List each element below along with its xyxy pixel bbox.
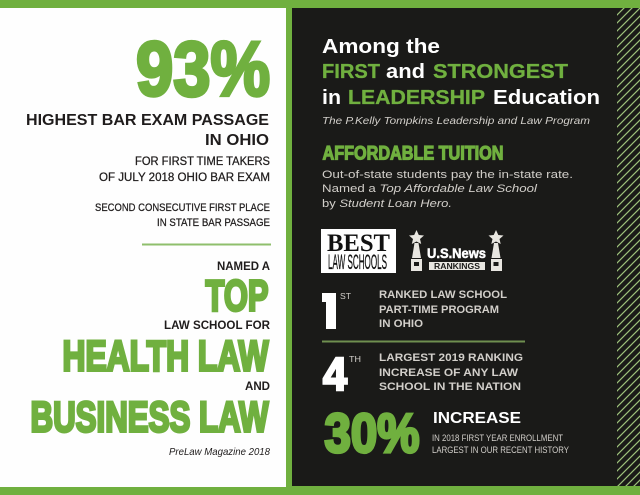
text: second consecutive first place: IN STATE BAR PASSAGE — [157, 217, 270, 229]
stat: 30% increase: LARGEST IN OUR RECENT HISTORY — [432, 445, 569, 455]
heading: among the first and strongest: Among the — [322, 36, 440, 58]
logo: U.S. News rankings: U.S.News — [427, 245, 486, 261]
logo: U.S. News rankings: RANKINGS — [434, 262, 481, 271]
text: tuition details: Named a Top Affordable Law School — [322, 183, 538, 195]
heading: highest bar exam passage: IN OHIO — [205, 132, 269, 149]
stat: 1st ranked law school — [322, 289, 507, 330]
icon: left trophy — [409, 230, 424, 271]
text: first time takers: OF JULY 2018 OHIO BAR EXAM — [99, 172, 270, 184]
text: tuition details: Out-of-state students pay the in-state rate. — [322, 169, 573, 181]
heading: among the first and strongest: LEADERSHIP — [348, 87, 485, 109]
heading: business law: BUSINESS LAW — [30, 394, 269, 442]
panel: leadership education: LAW SCHOOLS — [328, 251, 387, 274]
text: and: AND — [245, 379, 270, 393]
text: tuition details — [322, 169, 573, 210]
numeral: 1 — [322, 293, 336, 329]
heading: among the first and strongest: STRONGEST — [433, 61, 568, 83]
heading: highest bar exam passage: HIGHEST BAR EXAM PASSAGE — [26, 112, 269, 129]
heading: health law: HEALTH LAW — [62, 332, 269, 380]
icon: right trophy — [488, 230, 504, 271]
subheading: leadership and law program: The P.Kelly Tompkins Leadership and Law Program — [322, 115, 590, 127]
text: law school for: LAW SCHOOL FOR — [164, 318, 270, 332]
heading: among the first and strongest: Education — [493, 87, 600, 109]
text: first time takers: FOR FIRST TIME TAKERS — [135, 156, 270, 168]
big stat: 93%: 93% — [136, 26, 270, 112]
stat: 1st ranked law school: RANKED LAW SCHOOL — [379, 289, 507, 301]
logo: U.S. News rankings — [427, 245, 486, 271]
stat: 4th largest ranking increase: SCHOOL IN THE NATION — [379, 381, 521, 393]
badge: best law schools: BEST — [327, 230, 390, 257]
heading: top: TOP — [206, 272, 268, 320]
stat: 30% increase: INCREASE — [433, 410, 521, 427]
heading: among the first and strongest: in — [322, 87, 341, 109]
stat: 4th largest ranking increase: INCREASE OF ANY LAW — [379, 367, 519, 379]
stat: 4th largest ranking increase — [323, 348, 523, 400]
stat: 1st ranked law school: IN OHIO — [379, 318, 423, 330]
heading: among the first and strongest — [322, 36, 600, 109]
stat: 1st ranked law school: PART-TIME PROGRAM — [379, 304, 499, 316]
text: tuition details: by Student Loan Hero. — [322, 198, 452, 210]
stat: 4th largest ranking increase: LARGEST 2019 RANKING — [379, 352, 523, 364]
heading: among the first and strongest: FIRST — [322, 61, 380, 83]
text: second consecutive first place: SECOND CONSECUTIVE FIRST PLACE — [95, 202, 270, 214]
text: second consecutive first place — [95, 202, 270, 229]
text: named a: NAMED A — [217, 259, 270, 273]
stat: 30% increase: 30% — [324, 402, 420, 464]
stat: 4th largest ranking increase: 4 — [323, 348, 347, 400]
heading: among the first and strongest: and — [386, 61, 425, 83]
heading: highest bar exam passage — [26, 112, 269, 149]
heading: affordable tuition: AFFORDABLE TUITION — [322, 144, 504, 164]
text: first time takers — [99, 156, 270, 184]
stat: 30% increase — [324, 402, 569, 464]
stat: 4th largest ranking increase: TH — [349, 355, 361, 364]
badge: best law schools — [321, 229, 396, 274]
panel: leadership education — [292, 8, 640, 486]
stat: 1st ranked law school: ST — [340, 292, 351, 301]
stat: 30% increase: IN 2018 FIRST YEAR ENROLLMENT — [432, 433, 563, 443]
source: PreLaw Magazine: PreLaw Magazine 2018 — [169, 446, 270, 458]
panel: bar exam and rankings — [0, 8, 286, 487]
